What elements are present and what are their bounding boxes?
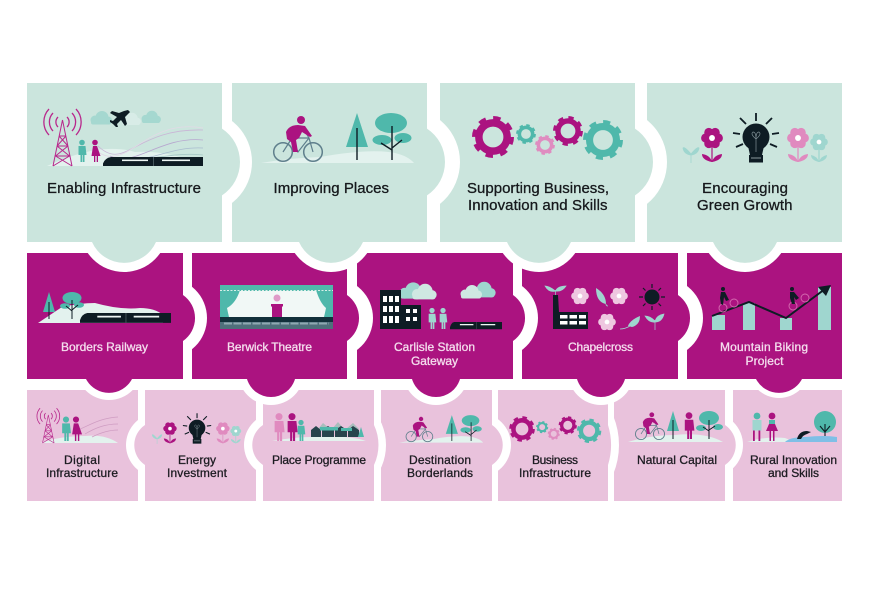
panel: Carlisle Station Gateway: Gateway xyxy=(411,354,458,368)
panel: Business Infrastructure xyxy=(498,390,611,501)
panel: Energy Investment xyxy=(134,390,256,501)
panel: Rural Innovation and Skills: Rural Innovation xyxy=(750,453,837,467)
panel: Digital Infrastructure xyxy=(27,390,138,501)
panel: Natural Capital: Natural Capital xyxy=(637,453,717,467)
panel: Digital Infrastructure: Infrastructure xyxy=(46,466,118,480)
panel: Borders Railway: Borders Railway xyxy=(61,340,148,354)
panel: Berwick Theatre xyxy=(192,253,359,397)
panel: Berwick Theatre: Berwick Theatre xyxy=(227,340,312,354)
panel: Encouraging Green Growth: Green Growth xyxy=(697,197,792,214)
icon: station building xyxy=(380,290,421,329)
panel: Improving Places xyxy=(232,83,445,263)
panel: Carlisle Station Gateway: Carlisle Station xyxy=(394,340,475,354)
chart: rising bars with arrow xyxy=(712,285,831,330)
panel: Chapelcross xyxy=(522,253,690,397)
panel: Encouraging Green Growth: Encouraging xyxy=(702,180,788,197)
panel: Rural Innovation and Skills xyxy=(733,390,842,501)
panel: Business Infrastructure: Infrastructure xyxy=(519,466,591,480)
panel: Enabling Infrastructure: Enabling Infrastructure xyxy=(47,180,201,197)
panel: Place Programme xyxy=(252,390,378,501)
panel: Rural Innovation and Skills: and Skills xyxy=(768,466,819,480)
panel: Energy Investment: Energy xyxy=(178,453,216,467)
panel: Encouraging Green Growth xyxy=(647,83,842,263)
row two: magenta project pieces xyxy=(27,253,842,397)
icon: mast, people, plane and train xyxy=(44,109,204,166)
panel: Chapelcross: Chapelcross xyxy=(568,340,633,354)
panel: Borders Railway xyxy=(27,253,195,393)
panel: Energy Investment: Investment xyxy=(167,466,228,480)
panel: Supporting Business, Innovation and Skills: Innovation and Skills xyxy=(468,197,608,214)
panel: Place Programme: Place Programme xyxy=(272,453,366,467)
panel: Carlisle Station Gateway xyxy=(357,253,525,397)
icon: cyclist and trees xyxy=(261,113,414,163)
icon: gears xyxy=(474,118,621,158)
icon: theatre stage xyxy=(220,285,333,329)
panel: Mountain Biking Project: Mountain Biking xyxy=(720,340,808,354)
panel: Business Infrastructure: Business xyxy=(532,453,578,467)
panel: Supporting Business, Innovation and Skills xyxy=(440,83,653,263)
panel: Supporting Business, Innovation and Skills: Supporting Business, xyxy=(467,180,609,197)
panel: Improving Places: Improving Places xyxy=(274,180,389,197)
panel: Destination Borderlands: Destination xyxy=(409,453,471,467)
panel: Destination Borderlands xyxy=(381,390,503,501)
icon: factory xyxy=(545,286,588,329)
row one: green theme pieces xyxy=(27,83,842,263)
icon: sun xyxy=(639,284,665,310)
panel: Digital Infrastructure: Digital xyxy=(64,453,100,467)
panel: Destination Borderlands: Borderlands xyxy=(407,466,473,480)
panel: Natural Capital xyxy=(614,390,736,501)
panel: Enabling Infrastructure xyxy=(27,83,240,263)
row three: pink programme pieces xyxy=(27,369,842,521)
panel: Mountain Biking Project xyxy=(687,253,842,393)
icon: lightbulb and flowers xyxy=(683,113,828,163)
panel: Mountain Biking Project: Project xyxy=(746,354,784,368)
